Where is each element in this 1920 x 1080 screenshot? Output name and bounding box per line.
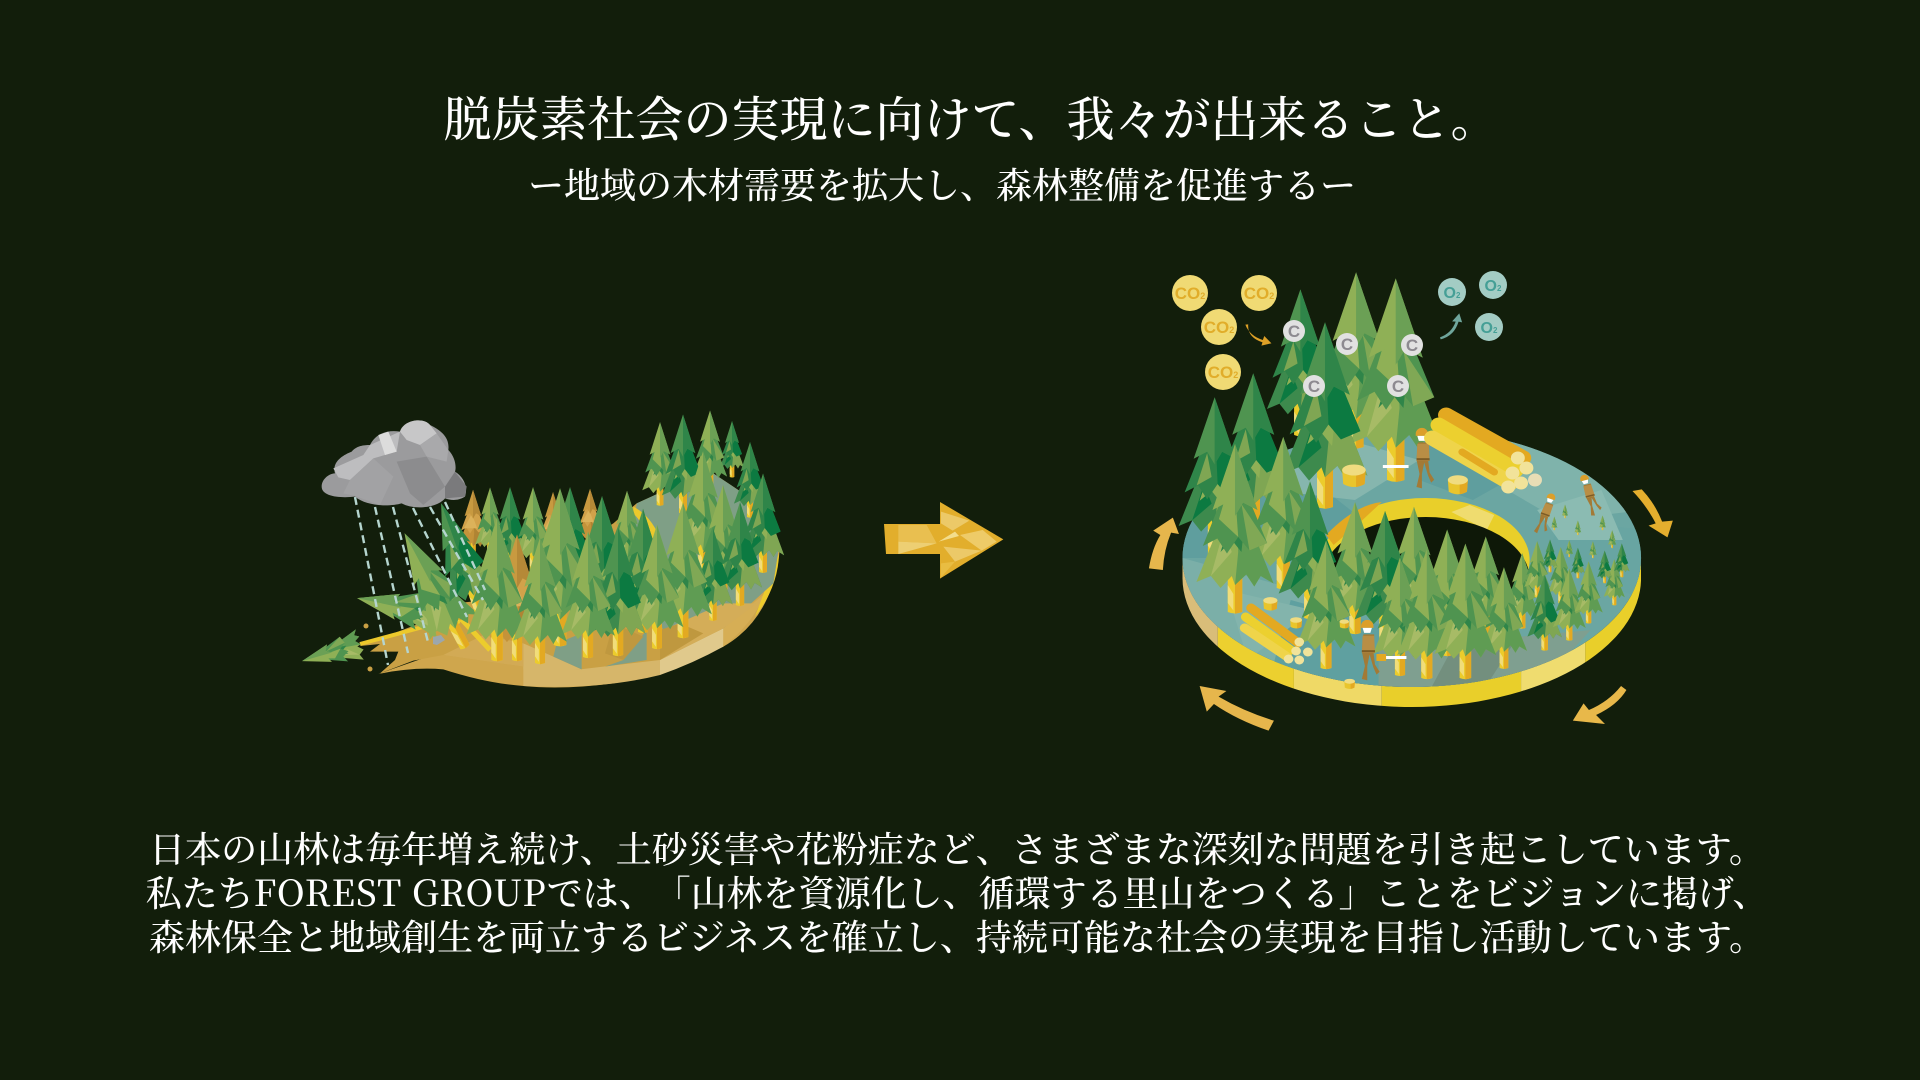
- eroded island ground: [360, 473, 780, 687]
- panel: restored forest ring: [1149, 272, 1673, 731]
- carbon markers: C: [1392, 377, 1404, 396]
- ring platform: [1182, 435, 1642, 707]
- carbon markers: [1283, 320, 1423, 397]
- arrow: oxygen released: [1440, 313, 1462, 339]
- rain: [355, 497, 485, 665]
- cycle arrow: bottom right: [1573, 686, 1626, 724]
- planting workers: [1533, 473, 1603, 536]
- title: 脱炭素社会の実現に向けて、我々が出来ること。: [443, 81, 1499, 150]
- body text: 日本の山林は毎年増え続け、土砂災害や花粉症など、さまざまな深刻な問題を引き起こしています。: [149, 822, 1765, 873]
- carbon dioxide bubbles: [1172, 275, 1277, 390]
- carbon markers: C: [1406, 336, 1418, 355]
- oxygen bubbles: O2: [1444, 285, 1461, 302]
- fallen trees: [298, 495, 504, 676]
- carbon dioxide bubbles: CO2: [1208, 363, 1238, 382]
- stumps and chainsaw worker: [1263, 597, 1406, 689]
- carbon dioxide bubbles: CO2: [1204, 318, 1234, 337]
- stumps and worker at back: [1342, 428, 1468, 494]
- subtitle: ー地域の木材需要を拡大し、森林整備を促進するー: [528, 158, 1356, 209]
- left and center trees: [1179, 373, 1341, 619]
- big carbon-storing trees: [1267, 272, 1442, 509]
- arrow: transition: [884, 502, 1003, 579]
- carbon dioxide bubbles: CO2: [1175, 284, 1205, 303]
- carbon dioxide bubbles: CO2: [1244, 284, 1274, 303]
- forest inside ring: [1297, 502, 1625, 679]
- carbon markers: C: [1341, 335, 1353, 354]
- body text: 私たちFOREST GROUPでは、「山林を資源化し、循環する里山をつくる」ことをビジョンに掲げ、: [146, 866, 1768, 917]
- cycle arrow: top right: [1632, 489, 1673, 537]
- illustration scene: [302, 271, 1673, 731]
- body text: [146, 822, 1768, 961]
- oxygen bubbles: [1438, 271, 1507, 341]
- icon: storm cloud: [322, 420, 467, 507]
- carbon markers: C: [1288, 322, 1300, 341]
- arrow: carbon absorbed: [1245, 324, 1271, 346]
- carbon markers: C: [1308, 377, 1320, 396]
- log pile bottom: [1245, 608, 1313, 664]
- log pile top: [1432, 415, 1542, 494]
- body text: 森林保全と地域創生を両立するビジネスを確立し、持続可能な社会の実現を目指し活動しています。: [149, 910, 1765, 961]
- panel: degraded forest: [298, 410, 784, 687]
- young saplings: [1543, 505, 1629, 583]
- oxygen bubbles: O2: [1481, 320, 1498, 337]
- oxygen bubbles: O2: [1485, 278, 1502, 295]
- cycle arrow: left: [1149, 518, 1179, 570]
- back trees: [459, 410, 784, 573]
- cycle arrow: bottom left: [1200, 686, 1274, 731]
- middle trees: [467, 451, 762, 664]
